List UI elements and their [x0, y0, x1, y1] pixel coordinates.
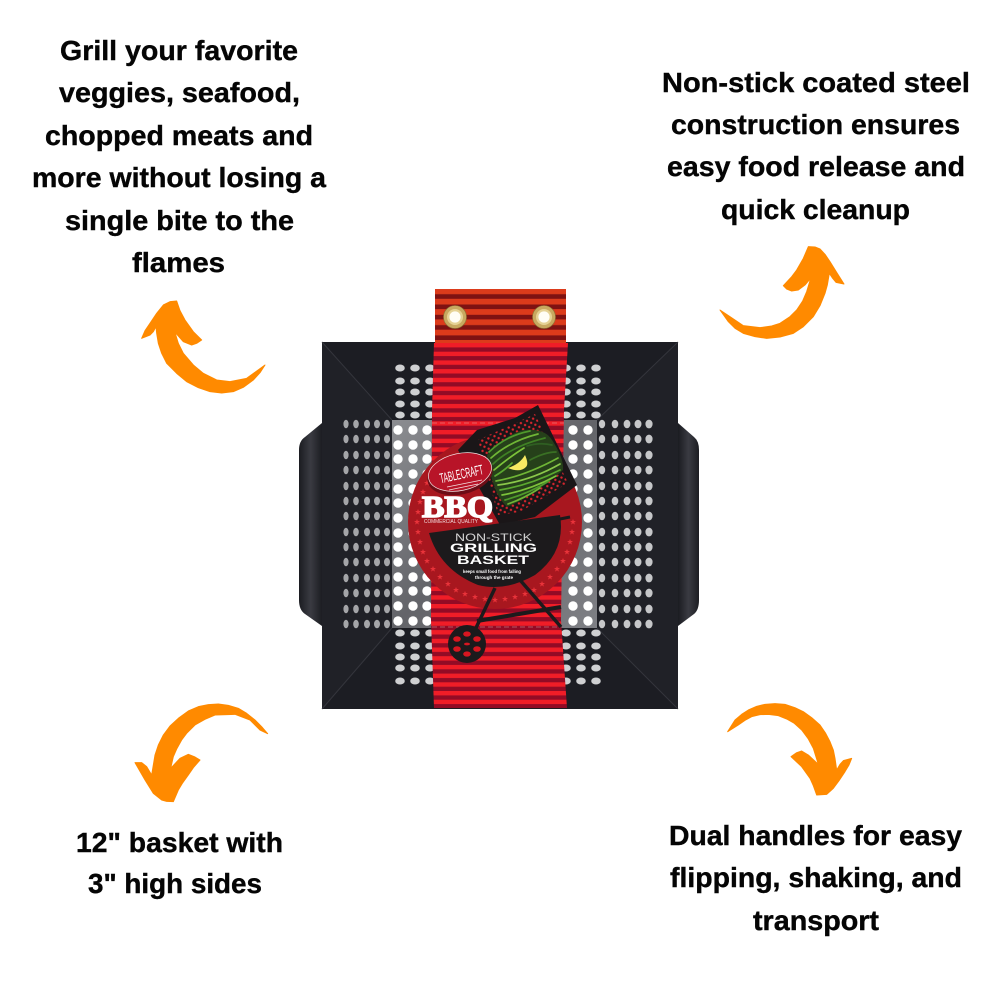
basket handles: [299, 423, 699, 626]
text: grill your favorite: single bite to the: [65, 205, 294, 236]
text: non-stick coated steel: [662, 67, 970, 225]
basket holes: [343, 364, 653, 684]
text: basket size: 3" high sides: [88, 868, 262, 899]
text: dual handles: [669, 820, 962, 936]
text: grill your favorite: more without losing a: [32, 162, 326, 193]
kettle grill graphic: [429, 515, 570, 663]
text: product name: [450, 532, 537, 580]
heading: BBQ: BBQ: [422, 489, 493, 524]
round red badge: [408, 435, 582, 609]
basket body: [322, 342, 678, 709]
text: product name: through the grate: [475, 575, 513, 580]
arrow: top left: [142, 301, 265, 393]
text: dual handles: flipping, shaking, and: [670, 862, 962, 893]
photo: basket with asparagus: [458, 405, 577, 525]
text: grill your favorite: [32, 35, 326, 278]
text: dual handles: transport: [753, 905, 879, 936]
text: product name: NON-STICK: [455, 532, 533, 544]
product: grilling basket: [299, 289, 699, 709]
text: non-stick coated steel: quick cleanup: [721, 194, 910, 225]
text: grill your favorite: Grill your favorite: [60, 35, 298, 66]
brass grommets: [444, 306, 556, 328]
arrow: bottom right: [728, 704, 852, 795]
text: non-stick coated steel: easy food release and: [667, 151, 965, 182]
arrow: top right: [720, 247, 844, 338]
heading: BBQ: COMMERCIAL QUALITY: [424, 519, 478, 525]
text: grill your favorite: chopped meats and: [45, 120, 313, 151]
text: product name: GRILLING: [450, 541, 537, 555]
text: grill your favorite: veggies, seafood,: [59, 77, 300, 108]
logo: TableCraft oval: [424, 447, 496, 501]
text: non-stick coated steel: construction ensures: [671, 109, 960, 140]
red striped label band: [431, 289, 568, 708]
text: product name: BASKET: [457, 553, 530, 567]
text: dual handles: Dual handles for easy: [669, 820, 962, 851]
text: basket size: [76, 827, 283, 899]
logo: TableCraft oval: TABLECRAFT: [438, 461, 485, 486]
text: grill your favorite: flames: [132, 247, 225, 278]
text: product name: keeps small food from falling: [463, 569, 521, 574]
arrow: bottom left: [135, 704, 268, 802]
text: basket size: 12" basket with: [76, 827, 283, 858]
text: non-stick coated steel: Non-stick coated steel: [662, 67, 970, 98]
